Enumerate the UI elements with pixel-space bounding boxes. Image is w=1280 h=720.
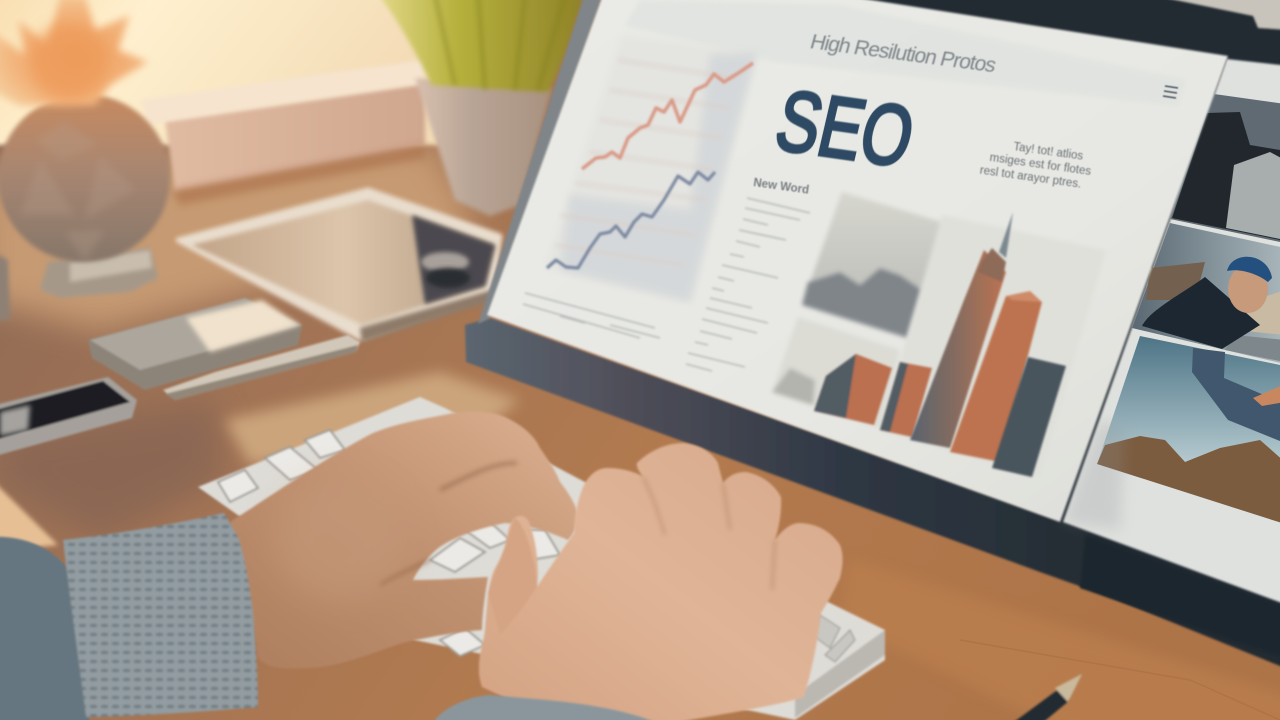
power bank <box>88 298 302 390</box>
skyscraper <box>910 212 1013 448</box>
bar building: dark tower <box>992 357 1066 477</box>
strip photo: city tower <box>1170 93 1280 243</box>
screen body text <box>523 198 810 371</box>
panel: monitor screen <box>487 0 1228 522</box>
screen photo: tower backdrop <box>880 215 1106 478</box>
screen photo: small buildings <box>772 317 900 428</box>
pen on desk <box>163 335 360 400</box>
bar building: second block <box>880 362 932 437</box>
panel: right photo strip <box>1063 59 1280 606</box>
keyboard <box>198 397 885 720</box>
monitor back panel <box>465 0 1280 670</box>
bar building: orange tower <box>950 291 1042 462</box>
SEO title: SEO <box>768 73 922 186</box>
right hand <box>479 443 843 720</box>
smartphone <box>0 377 137 456</box>
icon: vase with orange plant <box>0 0 170 320</box>
bar building: short block <box>814 354 892 425</box>
right sweater sleeve <box>432 695 662 720</box>
screen note text <box>979 137 1094 192</box>
line chart <box>545 36 757 302</box>
screen heading: High Resilution Protos <box>808 31 998 77</box>
strip photo: man in beanie <box>1132 223 1280 364</box>
screen note text: resl tot arayor ptres. <box>979 165 1082 191</box>
screen note text: Tay! tot! atlios <box>1013 141 1084 163</box>
screen note text: msiges est for flotes <box>989 152 1092 178</box>
tablet on desk <box>178 190 500 342</box>
window and sill <box>0 0 440 205</box>
pen tip <box>1010 674 1082 720</box>
icon: pot with green plant <box>375 0 585 216</box>
strip photo: arm and mountains <box>1097 336 1280 524</box>
screen photo: city skyline <box>802 192 948 338</box>
left hand <box>230 412 577 668</box>
icon: hamburger menu <box>1163 86 1178 98</box>
left sweater sleeve <box>0 513 258 720</box>
screen subheading: New Word <box>753 177 810 197</box>
